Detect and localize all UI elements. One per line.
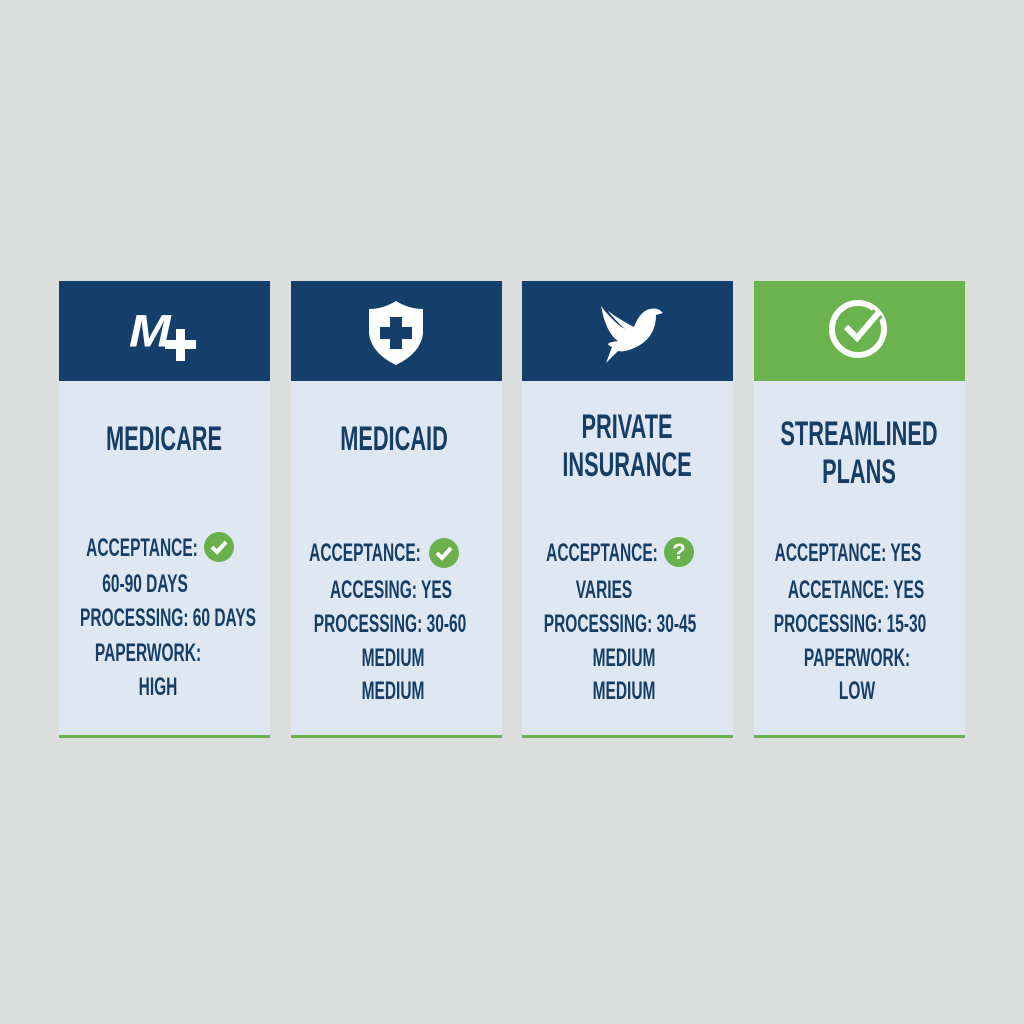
details <box>544 537 696 705</box>
card: streamlined plans <box>754 281 965 738</box>
details <box>309 538 466 705</box>
header: medicare icon <box>59 281 270 381</box>
header: check icon <box>754 281 965 381</box>
card: medicaid <box>291 281 502 738</box>
details <box>774 539 926 705</box>
details: ACCEPTANCE: YES <box>775 539 921 567</box>
details: HIGH <box>139 673 177 701</box>
details: PROCESSING: 15-30 <box>774 610 926 638</box>
details: ? <box>672 539 686 564</box>
title: MEDICAID <box>340 420 448 458</box>
details: LOW <box>839 677 875 705</box>
details: MEDIUM <box>593 644 655 672</box>
details: ACCEPTANCE: <box>86 534 198 562</box>
card: private insurance <box>522 281 733 738</box>
details: MEDIUM <box>593 677 655 705</box>
details: PROCESSING: 30-45 <box>544 610 696 638</box>
header: shield icon <box>291 281 502 381</box>
card: streamlined plans: PLANS <box>822 453 896 491</box>
title: STREAMLINED <box>780 415 938 453</box>
details <box>80 532 256 701</box>
title: PRIVATE <box>581 408 673 446</box>
details: PROCESSING: 60 DAYS <box>80 604 256 632</box>
card: private insurance: INSURANCE <box>562 446 692 484</box>
details: ACCEPTANCE: <box>309 539 421 567</box>
header: medicare icon: M <box>129 307 172 357</box>
title: MEDICARE <box>106 420 222 458</box>
card: medicare <box>59 281 270 738</box>
details: PAPERWORK: <box>95 639 201 667</box>
details: 60-90 DAYS <box>102 570 188 598</box>
details: VARIES <box>576 576 632 604</box>
details: ACCETANCE: YES <box>788 576 924 604</box>
details: ACCESING: YES <box>330 576 452 604</box>
details: MEDIUM <box>362 677 424 705</box>
details: PROCESSING: 30-60 <box>314 610 466 638</box>
header: dove icon <box>522 281 733 381</box>
details: PAPERWORK: <box>804 644 910 672</box>
details: ACCEPTANCE: <box>546 539 658 567</box>
details: MEDIUM <box>362 644 424 672</box>
